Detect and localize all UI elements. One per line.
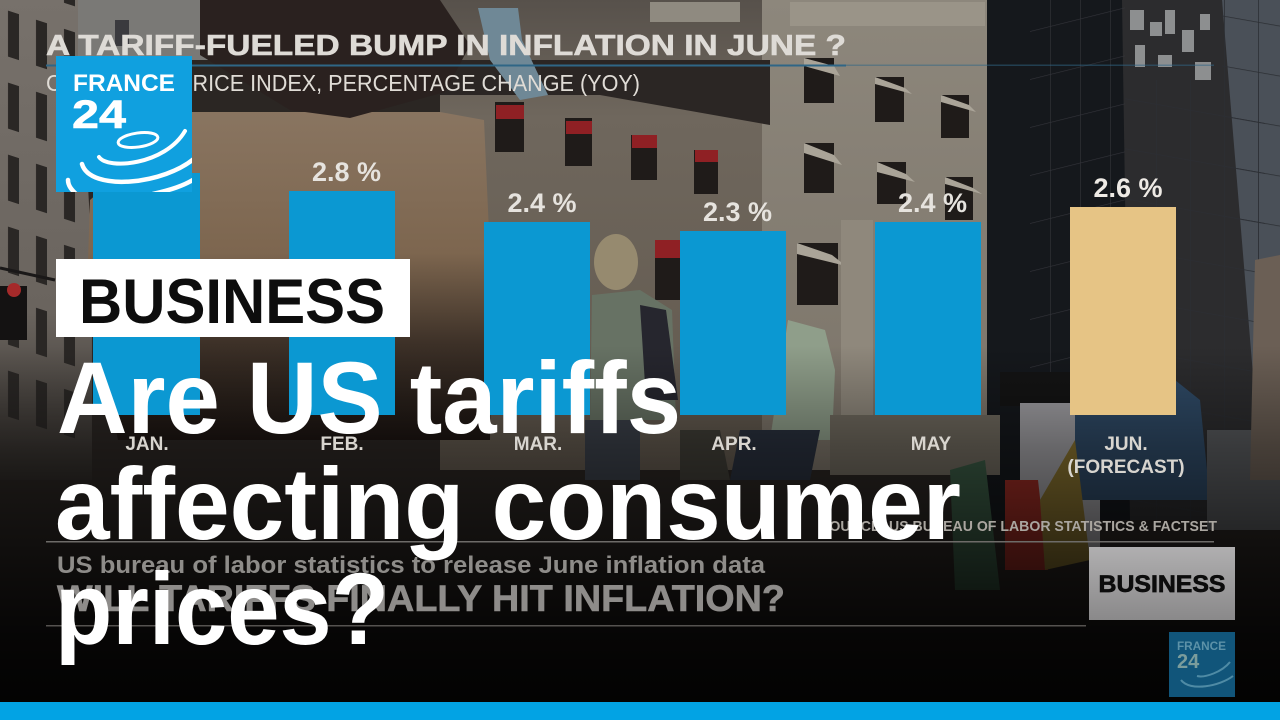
cream awnings — [797, 58, 982, 266]
bar: June forecast: JUN. — [1104, 434, 1148, 455]
icon: globe rings — [68, 130, 196, 194]
bar: May: 2.4 % — [898, 188, 967, 218]
bar: June forecast — [1067, 173, 1185, 478]
bottom blue strip — [0, 702, 1280, 720]
glass reflections — [1130, 10, 1211, 80]
logo: FRANCE 24 — [56, 56, 196, 194]
blue blurred object — [478, 8, 548, 100]
faded logo: FRANCE 24: FRANCE — [1177, 639, 1226, 653]
bar: May: MAY — [911, 434, 952, 455]
bar: April — [680, 197, 786, 455]
video badge: BUSINESS — [1089, 547, 1235, 620]
dark head top — [200, 0, 470, 118]
stone column — [841, 220, 873, 470]
section tag: BUSINESS: BUSINESS — [79, 267, 385, 337]
bar: March — [484, 188, 590, 455]
pedestrian with backpack — [590, 234, 678, 420]
chart baseline rule — [46, 541, 1214, 542]
bar: April: 2.3 % — [703, 197, 772, 227]
lower video sub-headline: WILL TARIFFS FINALLY HIT INFLATION? — [57, 578, 785, 619]
balustrade on roof — [650, 2, 740, 22]
street crowd and storefront — [585, 255, 1280, 590]
main headline: Are US tariffs — [57, 341, 681, 455]
video badge: BUSINESS: BUSINESS — [1098, 571, 1226, 598]
chart title: A TARIFF-FUELED BUMP IN INFLATION IN JUNE ? — [46, 30, 846, 62]
logo: FRANCE 24: 24 — [72, 93, 127, 137]
dark ledge — [440, 60, 770, 125]
bar: February: FEB. — [320, 434, 364, 455]
center building: left wing — [440, 0, 765, 470]
main headline: affecting consumer — [55, 447, 961, 561]
chart subtitle: CONSUMER PRICE INDEX, PERCENTAGE CHANGE (YOY) — [46, 70, 640, 96]
lower video headline: US bureau of labor statistics to release June inflation data — [57, 552, 766, 579]
bar: January — [93, 173, 200, 415]
chart source: SOURCE: US BUREAU OF LABOR STATISTICS & FACTSET — [820, 518, 1217, 535]
lower video rule — [46, 625, 1086, 626]
logo: FRANCE 24: FRANCE — [73, 70, 175, 97]
bar: February: 2.8 % — [312, 157, 381, 187]
faded logo: FRANCE 24: 24 — [1177, 651, 1200, 673]
bar: February — [289, 157, 395, 455]
pedestrian in mint shirt — [770, 320, 835, 440]
bar: March: 2.4 % — [507, 188, 577, 218]
bar: June forecast: (FORECAST) — [1067, 457, 1185, 478]
foreground tan bag — [88, 112, 492, 440]
right dark glass tower — [987, 0, 1280, 520]
left building — [0, 0, 92, 480]
bar: June forecast: 2.6 % — [1093, 173, 1163, 203]
red awnings — [496, 105, 718, 258]
axis label: January: JAN. — [125, 434, 169, 455]
main headline — [55, 341, 961, 666]
center building: right wing — [762, 0, 987, 470]
building windows — [495, 58, 973, 305]
faded logo: FRANCE 24 — [1169, 632, 1235, 697]
chart title rule — [46, 64, 846, 66]
bar: May — [875, 188, 981, 455]
bar: March: MAR. — [514, 434, 562, 455]
bar chart: inflation by month — [93, 157, 1185, 478]
upper backdrop — [78, 0, 208, 60]
bar: April: APR. — [711, 434, 757, 455]
main headline: prices? — [55, 552, 389, 666]
